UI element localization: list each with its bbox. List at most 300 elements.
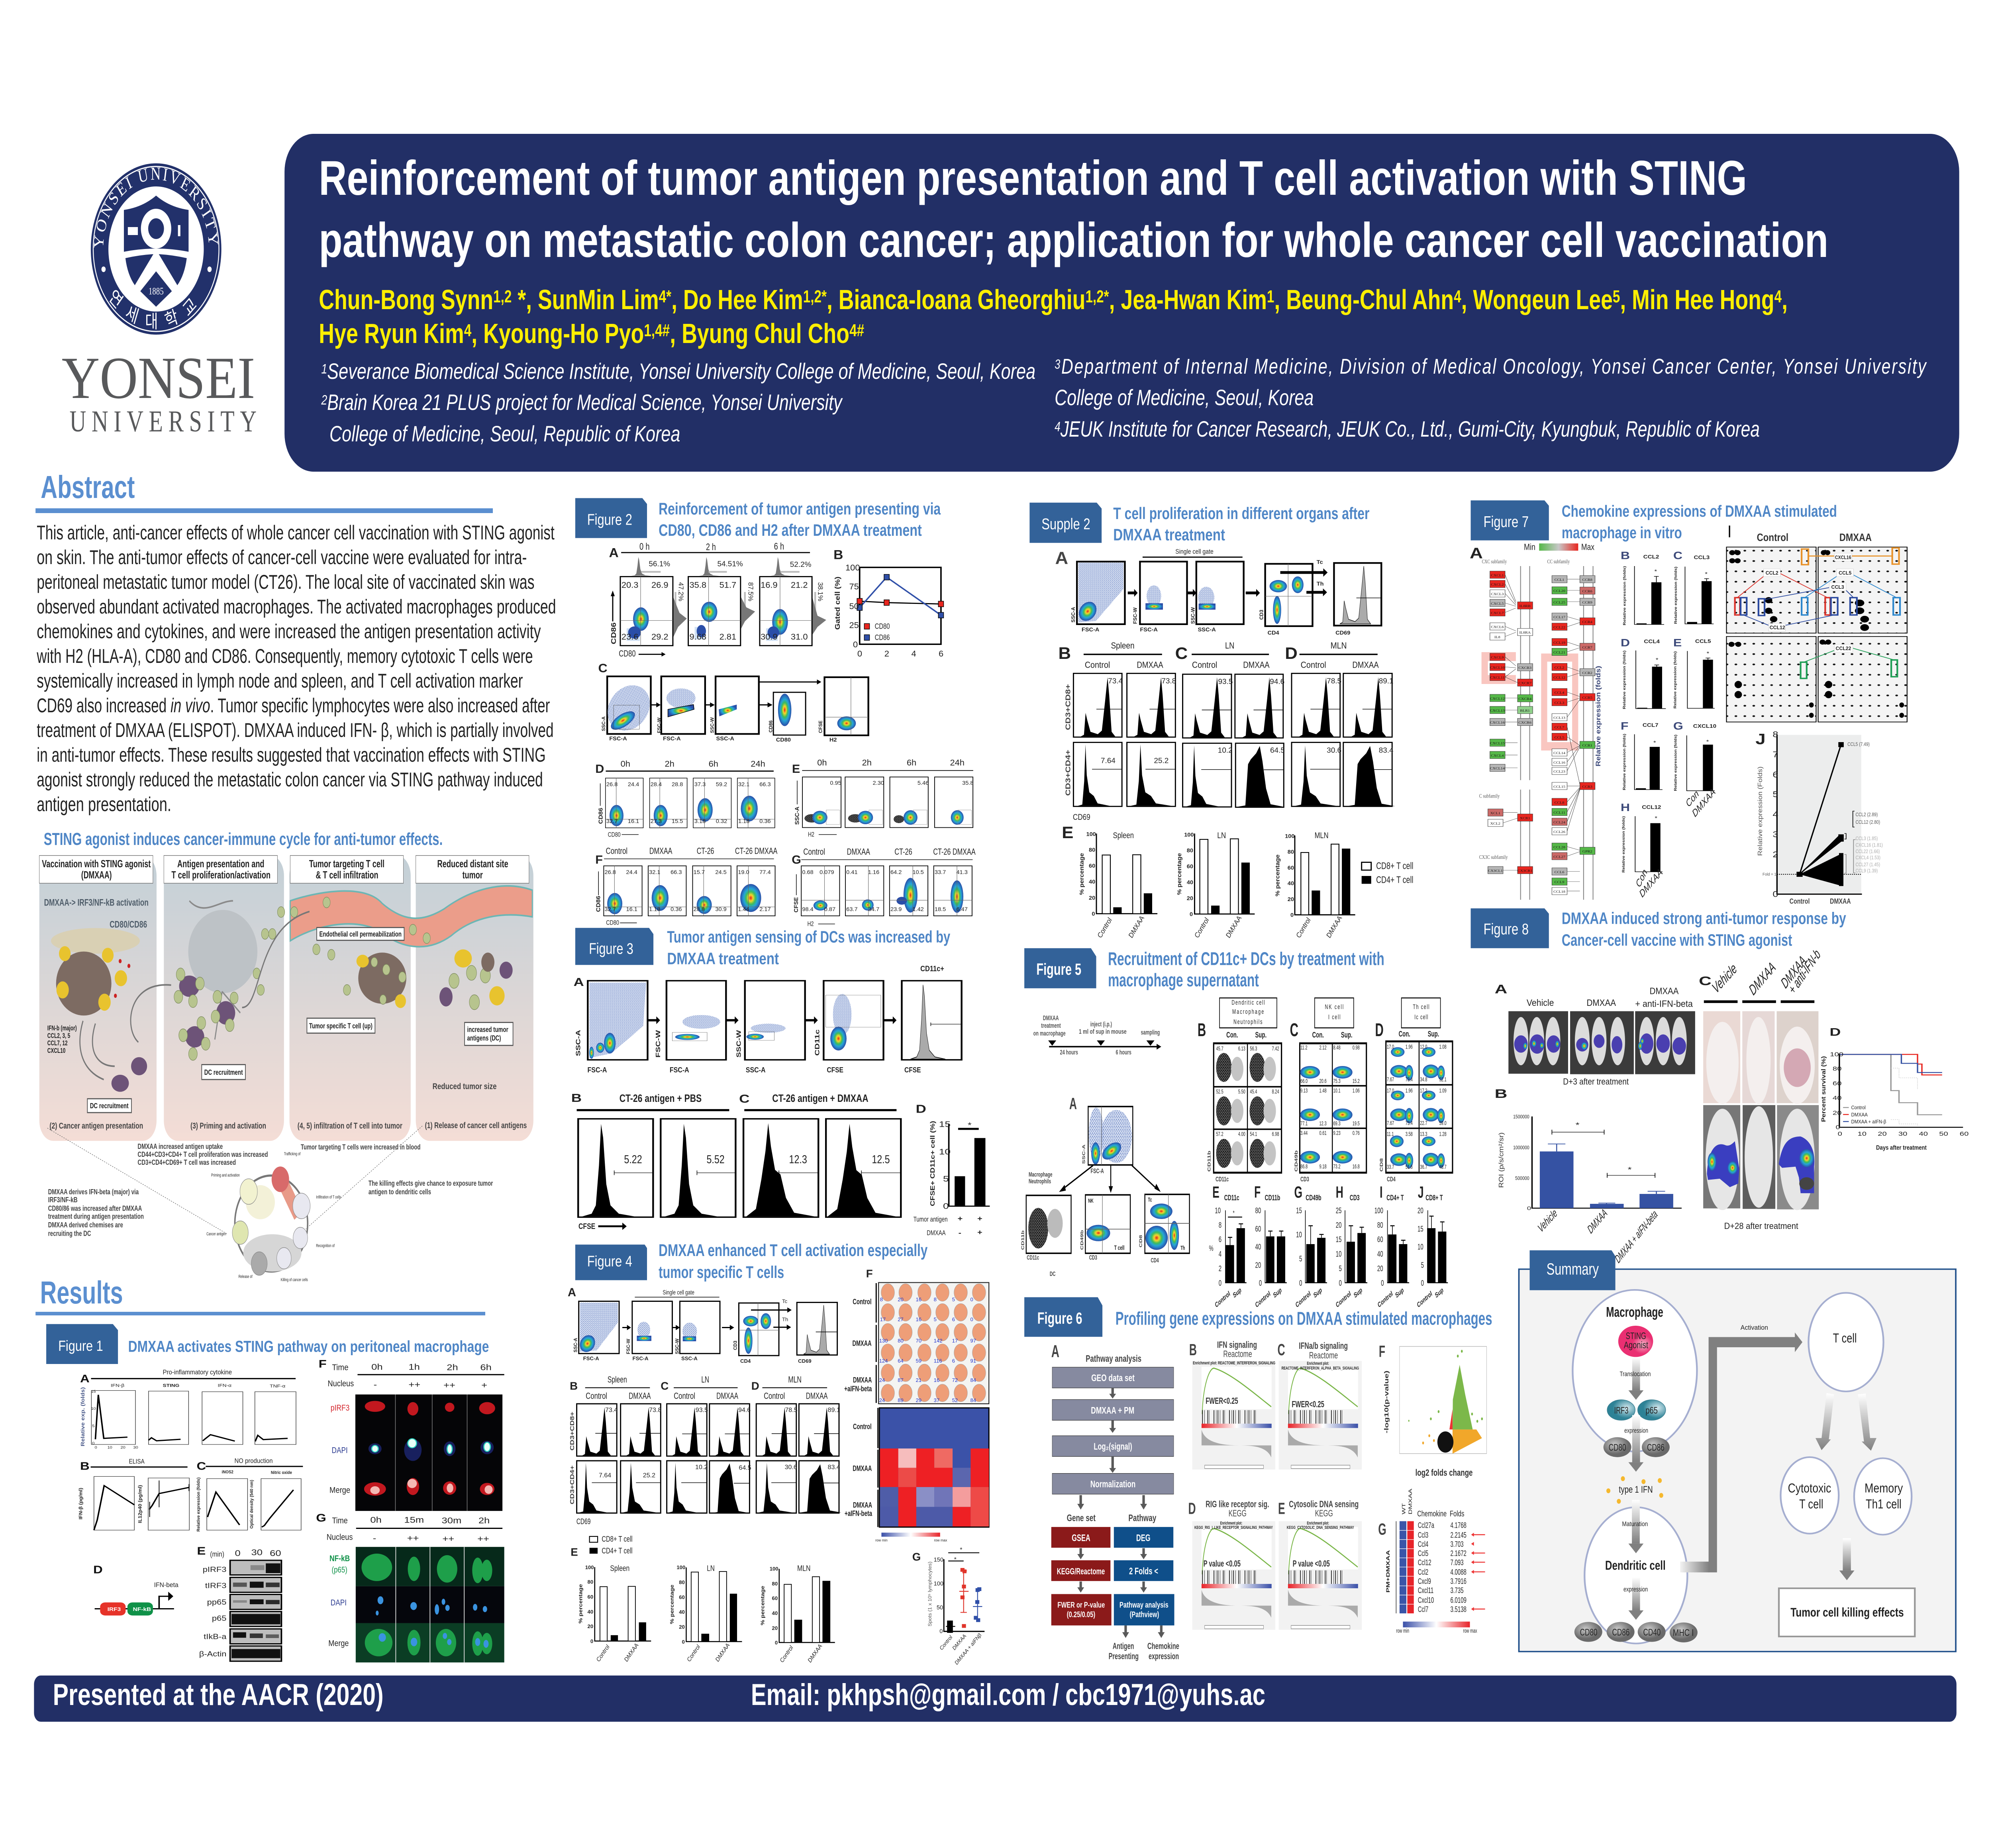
survival curve D: 20 bbox=[1878, 1131, 1887, 1137]
micrographs: NF-kB: G bbox=[316, 1512, 326, 1524]
authors: Chun-Bong Synn1,2 *, SunMin Lim4*, Do Hee Kim1,2*, Bianca-Ioana Gheorghiu1,2*, Jea-Hwan Kim1, Beung-Chul Ahn4, Wongeun Lee5, Min Hee Hong4, bbox=[319, 284, 1788, 316]
ELISPOT plate F: 84 bbox=[971, 1377, 976, 1383]
GSEA plots B-E: E bbox=[1278, 1500, 1285, 1518]
flow plots D: CD80 bbox=[608, 831, 621, 838]
flow plots A: 2 h bbox=[706, 542, 716, 553]
flowchart A: Antigen bbox=[1113, 1641, 1134, 1651]
flow plots G: G bbox=[792, 853, 801, 866]
flow plots A: 47.2% bbox=[677, 582, 685, 601]
arrow: activation: Activation bbox=[1741, 1324, 1768, 1331]
flow plots A: 21.2 bbox=[791, 580, 808, 590]
KEGG chemokine pathway A: CXCL5 bbox=[1491, 602, 1504, 606]
rotated labels for Figure 8: DMXAA + aIFN-beta bbox=[1613, 1207, 1659, 1266]
western blot: 0 bbox=[235, 1549, 241, 1558]
affiliations left: College of Medicine, Seoul, Republic of Korea bbox=[329, 421, 680, 446]
header banner bbox=[284, 134, 1959, 472]
micrographs: NF-kB: ++ bbox=[407, 1534, 419, 1543]
flow plots G: 98.4 bbox=[802, 906, 814, 913]
bar charts E: 40 bbox=[1187, 880, 1193, 886]
flow plot grids B C D: 0.98 bbox=[1353, 1045, 1360, 1051]
flow plots D: 3.18 bbox=[694, 818, 706, 825]
figure title bbox=[659, 1241, 928, 1282]
flow plot grids B C D: 48.7 bbox=[1439, 1164, 1447, 1170]
bar charts E to J: Control bbox=[1295, 1289, 1312, 1309]
heatmap F: row min bbox=[875, 1538, 888, 1542]
histograms B C D: 25.2 bbox=[643, 1472, 655, 1479]
bar chart B: 0 bbox=[1527, 1205, 1531, 1211]
flow plot grids B C D: 1.28 bbox=[1439, 1131, 1447, 1137]
GSEA plots B-E: D bbox=[1188, 1500, 1196, 1518]
flow plots G bbox=[792, 847, 976, 927]
gating plots A: SSC-A bbox=[1198, 627, 1216, 633]
histograms B C D: 89.1 bbox=[828, 1406, 840, 1413]
panel column: antigen presentation bbox=[164, 856, 284, 1141]
flow plot grids B C D: 17.0 bbox=[1387, 1087, 1394, 1094]
GSEA plots B-E: FWER<0.25 bbox=[1206, 1396, 1238, 1406]
bar charts E to J: Control bbox=[1255, 1289, 1271, 1309]
bar charts E to J: 4 bbox=[1219, 1249, 1221, 1258]
KEGG chemokine pathway A: CXCL7 bbox=[1491, 611, 1504, 615]
bar charts E: CD8+ T cell bbox=[1376, 861, 1413, 871]
flow plots A: 23.6 bbox=[622, 632, 638, 641]
flow plots G: 1.16 bbox=[868, 869, 879, 876]
flow plot grids B C D: 8.48 bbox=[1333, 1045, 1341, 1051]
flow gating A: Macrophage bbox=[1029, 1171, 1052, 1178]
chart: NO production: Optical density (540 nm) bbox=[249, 1480, 254, 1529]
chemokine heatmap G: 2.1672 bbox=[1450, 1548, 1467, 1558]
histograms B C D: 30.6 bbox=[785, 1464, 797, 1471]
notes around the cycle: CD44+CD3+CD4+ T cell proliferation was increased bbox=[137, 1150, 268, 1159]
flow plot grids B C D: 12.3 bbox=[1319, 1120, 1327, 1127]
summary label bbox=[1529, 1250, 1616, 1290]
bar charts E to J: Sup bbox=[1394, 1286, 1405, 1300]
figure label bbox=[575, 928, 653, 965]
flow plots G: CT-26 bbox=[894, 847, 912, 856]
histograms B C D: Control bbox=[1192, 660, 1217, 670]
flow plot grids B C D: 13.3 bbox=[1420, 1131, 1427, 1137]
KEGG chemokine pathway A: CCL11 bbox=[1553, 811, 1565, 815]
flow plot grids B C D: CD11b bbox=[1207, 1150, 1212, 1172]
bar charts E to J: 20 bbox=[1336, 1220, 1341, 1230]
notes around the cycle: Tumor targeting T cells were increased in blood bbox=[301, 1143, 421, 1151]
GSEA plots B-E: Enrichment plot: bbox=[1307, 1521, 1329, 1525]
flow plots G: 0.079 bbox=[820, 869, 834, 876]
fold change chart J: CCL2 (2.89) bbox=[1855, 811, 1878, 817]
KEGG chemokine pathway A: CXCR6 bbox=[1518, 721, 1531, 725]
KEGG chemokine pathway A: CCL2 bbox=[1555, 666, 1565, 670]
KEGG chemokine pathway A: CXCL15 bbox=[1490, 742, 1505, 745]
rotated labels for Figure 8: Vehicle bbox=[1710, 960, 1739, 997]
bar chart D: 5 bbox=[943, 1174, 949, 1184]
flowchart A: DEG bbox=[1136, 1533, 1151, 1543]
gating plots A: FSC-W bbox=[1132, 607, 1138, 624]
flow plot grids B C D: 5.50 bbox=[1238, 1088, 1245, 1095]
flow plots A: 16.9 bbox=[761, 580, 778, 590]
gating plots A: Tc bbox=[782, 1298, 788, 1304]
flow plots E: E bbox=[792, 762, 800, 776]
flow gating A: CD11c bbox=[1027, 1254, 1039, 1261]
western blot: 30 bbox=[251, 1548, 263, 1557]
chemokine heatmap G: Cxcl10 bbox=[1418, 1595, 1434, 1605]
ELISPOT plate F: 6 bbox=[952, 1358, 955, 1364]
ELISPOT plate F: 84 bbox=[971, 1397, 976, 1403]
histograms B C D: CD3+CD8+ bbox=[1064, 684, 1072, 730]
flow plots E: 24h bbox=[950, 758, 965, 768]
heatmap F: DMXAA bbox=[853, 1465, 872, 1473]
flow plot grids B C D: C bbox=[1290, 1020, 1298, 1041]
histograms B C D: 89.1 bbox=[1379, 677, 1394, 685]
chemokine heatmap G: Ccl5 bbox=[1418, 1548, 1428, 1558]
histograms B C D: Control bbox=[1301, 660, 1326, 670]
micrographs: pIRF3: F bbox=[319, 1358, 327, 1370]
heatmap F bbox=[845, 1408, 989, 1542]
line chart B: 2 bbox=[884, 649, 889, 658]
bar charts E: LN bbox=[707, 1564, 715, 1573]
flow plots F: 32.1 bbox=[649, 869, 661, 876]
heatmap F: row max bbox=[934, 1538, 947, 1542]
flow plot grids B C D: 7.67 bbox=[1387, 1076, 1394, 1083]
panel column: reduced distant tumor: Endothelial cell permeabilization bbox=[319, 930, 402, 939]
line chart B: B bbox=[833, 547, 843, 562]
figure label bbox=[575, 1244, 647, 1280]
logo: Yonsei University bbox=[62, 163, 257, 438]
bar chart D: + bbox=[977, 1215, 982, 1223]
chemokine heatmap G: Ccl4 bbox=[1418, 1539, 1429, 1549]
line chart B: 4 bbox=[912, 649, 916, 658]
flow plot grids B C D: 1.09 bbox=[1439, 1087, 1447, 1094]
gating C: CD86 bbox=[768, 720, 773, 733]
title: Reinforcement of tumor antigen presentation and T cell activation with STING bbox=[319, 151, 1747, 206]
gating plots A: FSC-A bbox=[1082, 627, 1099, 633]
bar chart B: B bbox=[1495, 1087, 1507, 1101]
micrographs: pIRF3: Time bbox=[332, 1363, 349, 1372]
macrophage cell: STING bbox=[1626, 1331, 1646, 1341]
bar charts E: DMXAA bbox=[1324, 915, 1344, 939]
macrophage cell: CD86 bbox=[1647, 1442, 1665, 1453]
macrophage cell: Agonist bbox=[1624, 1340, 1648, 1350]
heading: Results bbox=[35, 1275, 485, 1315]
cycle wheel bbox=[47, 1126, 422, 1282]
gating plots A bbox=[574, 964, 962, 1074]
chemokine heatmap G bbox=[1378, 1488, 1485, 1634]
GSEA plots B-E: Reactome bbox=[1309, 1350, 1338, 1361]
ELISPOT plate F: 72 bbox=[952, 1377, 958, 1383]
flowchart A: Presenting bbox=[1109, 1651, 1139, 1661]
notes around the cycle: IRF3/NF-kB bbox=[48, 1196, 78, 1204]
bar charts B to H: D bbox=[1621, 637, 1630, 649]
memory Th1 cell: Memory bbox=[1865, 1481, 1903, 1495]
authors: Hye Ryun Kim4, Kyoung-Ho Pyo1,4#, Byung Chul Cho4# bbox=[319, 318, 864, 349]
bar chart D: * bbox=[968, 1121, 972, 1129]
ELISPOT plate F: 64 bbox=[898, 1358, 904, 1364]
bar charts B to H: Relative expression (folds) bbox=[1673, 651, 1677, 709]
western blot: tIkB-a bbox=[204, 1633, 227, 1641]
bar charts B to H: Relative expression (folds) bbox=[1622, 651, 1626, 709]
flow plots D: 26.8 bbox=[606, 782, 618, 788]
figure label bbox=[1471, 500, 1549, 540]
flow plots D: 32.7 bbox=[606, 818, 618, 825]
flow gating A: CD3 bbox=[1089, 1254, 1097, 1261]
KEGG chemokine pathway A: CCL12 bbox=[1553, 676, 1565, 680]
rotated labels for Figure 8: DMXAA bbox=[1747, 959, 1778, 999]
flow plot grids B C D: 59.0 bbox=[1439, 1120, 1447, 1126]
bar charts B to H: CXCL10 bbox=[1693, 723, 1716, 729]
panel column: vaccination: (DMXAA) bbox=[81, 869, 112, 881]
flow gating A: Th bbox=[1180, 1245, 1185, 1251]
histograms B C D: MLN bbox=[1331, 640, 1347, 651]
bar charts E to J: 0 bbox=[1421, 1278, 1424, 1288]
KEGG chemokine pathway A: CXCL3 bbox=[1491, 593, 1504, 596]
survival curve D: 20 bbox=[1833, 1109, 1842, 1116]
chemokine heatmap G: DMXAA bbox=[1408, 1488, 1413, 1515]
gating plots A: FSC-A bbox=[670, 1066, 689, 1074]
timeline: on macrophage bbox=[1033, 1030, 1066, 1037]
western blot bbox=[197, 1545, 281, 1661]
gating C: H2 bbox=[829, 737, 837, 743]
bar charts E: 100 bbox=[1285, 833, 1295, 839]
dot plot G: 100 bbox=[934, 1581, 943, 1587]
bar charts E to J: Sup bbox=[1272, 1286, 1282, 1300]
bar charts B to H: * bbox=[1705, 571, 1708, 577]
rotated labels for Figure 7 bars: Con bbox=[1684, 788, 1700, 809]
western blot: 60 bbox=[270, 1549, 281, 1558]
flow plots D: 15.5 bbox=[672, 818, 683, 825]
KEGG chemokine pathway A: C subfamily bbox=[1479, 793, 1500, 799]
gating plots A: FSC-A bbox=[588, 1066, 607, 1074]
flow plot grids B C D: 73.2 bbox=[1333, 1163, 1341, 1170]
flow plots E: 0h bbox=[817, 758, 827, 768]
KEGG chemokine pathway A: CX3CR1 bbox=[1518, 869, 1533, 873]
mouse imaging A: DMXAA bbox=[1650, 986, 1679, 996]
bar charts E: LN bbox=[1217, 831, 1226, 840]
bar chart D: D bbox=[916, 1102, 926, 1115]
macrophage cell bbox=[1572, 1290, 1697, 1472]
histograms B and C bbox=[571, 1092, 901, 1231]
survival curve D: 60 bbox=[1960, 1131, 1969, 1137]
ELISPOT plate F: 17 bbox=[952, 1338, 958, 1344]
bar charts E: CD8+ T cell bbox=[602, 1534, 633, 1544]
bar charts E bbox=[1062, 823, 1413, 939]
mouse photos C bbox=[1699, 974, 1819, 1231]
chart: NO production bbox=[196, 1457, 303, 1532]
panel column: reduced distant tumor: Reduced distant site bbox=[437, 858, 508, 870]
flow plots A: 9.68 bbox=[689, 632, 706, 641]
flow plots F: 66.3 bbox=[671, 869, 682, 876]
cycle wheel: Trafficking of bbox=[284, 1152, 301, 1156]
bar charts E bbox=[571, 1534, 835, 1664]
ELISPOT plate F: DMXAA bbox=[853, 1340, 872, 1348]
cytotoxic T cell: Cytotoxic bbox=[1788, 1481, 1831, 1495]
flow plot grids B C D: 3.44 bbox=[1300, 1130, 1308, 1137]
flow gating A: CD8 bbox=[1138, 1235, 1143, 1248]
bar charts E: 80 bbox=[588, 1579, 593, 1585]
rotated labels for Figure 8: DMXAA bbox=[1778, 952, 1809, 992]
flow plot grids B C D: 73.4 bbox=[1406, 1120, 1413, 1126]
bar charts E to J: 20 bbox=[1255, 1260, 1261, 1270]
gating plots A: Th bbox=[1317, 581, 1323, 587]
KEGG chemokine pathway A: CCL19 bbox=[1553, 641, 1565, 645]
flow plot grids B C D: 54.1 bbox=[1250, 1131, 1257, 1137]
histograms B C D: 78.5 bbox=[1327, 677, 1341, 685]
flow plots G: Control bbox=[803, 847, 825, 856]
survival curve D: 0 bbox=[1836, 1124, 1840, 1131]
volcano plot F: F bbox=[1379, 1343, 1385, 1361]
ELISPOT plate F: 80 bbox=[898, 1338, 904, 1344]
flowchart A: (Pathview) bbox=[1130, 1610, 1159, 1619]
bar charts E: CD4+ T cell bbox=[602, 1546, 633, 1555]
histograms B C D: 7.64 bbox=[1101, 756, 1116, 764]
dendritic cell: Dendritic cell bbox=[1605, 1558, 1666, 1573]
western blot: p65 bbox=[212, 1615, 226, 1623]
fold change chart J: 0 bbox=[1772, 890, 1778, 899]
ELISPOT plate F: 20 bbox=[898, 1296, 904, 1302]
fold change chart J: DMXAA bbox=[1830, 898, 1851, 905]
KEGG chemokine pathway A: CCR7 bbox=[1582, 646, 1592, 650]
flow plots G: 18.5 bbox=[935, 906, 946, 913]
chemokine heatmap G: 3.7916 bbox=[1450, 1576, 1467, 1586]
KEGG chemokine pathway A: IL8RA bbox=[1519, 631, 1531, 635]
dot plot G: DMXAA + aIFNβ bbox=[953, 1632, 983, 1666]
flow plots D: 32.1 bbox=[738, 782, 749, 788]
flow plot grids B C D: 17.0 bbox=[1387, 1043, 1394, 1050]
histograms B C D: CD3+CD4+ bbox=[1064, 750, 1072, 796]
chemokine heatmap G: 4.1768 bbox=[1450, 1521, 1467, 1530]
figure title: T cell proliferation in different organs after bbox=[1113, 504, 1370, 523]
bar charts E: 80 bbox=[1288, 849, 1294, 855]
heatmap F: DMXAA bbox=[853, 1501, 872, 1509]
KEGG chemokine pathway A: CCR2 bbox=[1582, 671, 1592, 675]
bar charts E: % percentage bbox=[760, 1586, 766, 1625]
flow plot grids B C D: Con. bbox=[1226, 1030, 1238, 1039]
abstract text block: systemically increased in lymph node and spleen, and T cell activation marker bbox=[37, 670, 523, 692]
flow plots D: 28.4 bbox=[651, 782, 662, 788]
panel column: vaccination: DMXAA-> IRF3/NF-kB activation bbox=[44, 897, 149, 908]
volcano plot F bbox=[1379, 1343, 1486, 1478]
rotated labels for Figure 7 bars: Con bbox=[1634, 867, 1649, 889]
flow plots A: 20.3 bbox=[622, 580, 638, 590]
micrographs: NF-kB: Time bbox=[332, 1516, 348, 1526]
bar charts E to J: CD8+ T bbox=[1425, 1193, 1443, 1202]
ELISPOT plate F: 8 bbox=[934, 1296, 937, 1302]
bar charts E: 100 bbox=[770, 1566, 778, 1572]
chemokine heatmap G: Ccl3 bbox=[1418, 1530, 1428, 1540]
rotated labels for Figure 7 bars: DMXAA bbox=[1637, 866, 1664, 900]
histograms B C D: DMXAA bbox=[1352, 660, 1379, 670]
bar charts E: DMXAA bbox=[1127, 915, 1146, 939]
notes around the cycle: DMXAA increased antigen uptake bbox=[137, 1143, 223, 1151]
bar charts E to J: G bbox=[1294, 1184, 1302, 1201]
flow plots D: 28.8 bbox=[672, 782, 683, 788]
diagram: promoter bbox=[93, 1564, 178, 1615]
flow plot grids B C D: 20.6 bbox=[1319, 1078, 1327, 1084]
panel: Summary bbox=[1519, 1250, 1956, 1652]
KEGG chemokine pathway A: Min bbox=[1524, 542, 1535, 552]
flow plot grids B C D: 10.1 bbox=[1333, 1087, 1341, 1094]
affiliations left bbox=[321, 359, 1035, 446]
chart: pro-inflammatory cytokine: TNF-α bbox=[270, 1384, 285, 1389]
flow plot grids B C D: CD49b bbox=[1294, 1150, 1299, 1172]
panel column: vaccination: IFN-b (major) bbox=[47, 1025, 77, 1032]
flow plot grids B C D: 1.96 bbox=[1406, 1087, 1413, 1094]
KEGG chemokine pathway A: CXCL9 bbox=[1491, 656, 1504, 660]
histograms B C D: DMXAA bbox=[629, 1391, 651, 1401]
macrophage cell: Macrophage bbox=[1606, 1304, 1663, 1320]
histograms B C D: C bbox=[661, 1380, 669, 1392]
flow gating A: CD49b bbox=[1080, 1230, 1084, 1250]
line chart B bbox=[833, 547, 943, 658]
arrows to T cell subsets bbox=[1816, 1393, 1876, 1451]
flow plots F bbox=[595, 846, 778, 926]
fold change chart J: 8 bbox=[1772, 729, 1778, 739]
KEGG chemokine pathway A: CCL7 bbox=[1555, 726, 1565, 729]
flow plots G: 63.7 bbox=[846, 906, 858, 913]
bar charts E to J: 0 bbox=[1339, 1278, 1342, 1288]
flow plots A: 35.8 bbox=[689, 580, 706, 590]
T cell bbox=[1808, 1293, 1884, 1391]
chemokine heatmap G: Cxcl11 bbox=[1418, 1585, 1433, 1595]
ELISPOT plate F: 17 bbox=[880, 1316, 886, 1322]
heatmap F: Control bbox=[853, 1423, 872, 1431]
flow plots D: 0h bbox=[621, 759, 630, 768]
flow plots F: CD86 bbox=[595, 896, 602, 912]
gating plots A: A bbox=[568, 1286, 576, 1299]
bar chart B: * bbox=[1576, 1121, 1580, 1129]
histograms B C D: 78.5 bbox=[785, 1406, 798, 1413]
bar charts E: 60 bbox=[588, 1594, 593, 1600]
flow plots A: 52.2% bbox=[790, 560, 811, 568]
bar charts E to J: CD3 bbox=[1350, 1193, 1360, 1202]
flow plots F: F bbox=[595, 853, 603, 866]
affiliations left: 2Brain Korea 21 PLUS project for Medical Science, Yonsei University bbox=[321, 390, 843, 415]
flow plot grids B C D: Sup. bbox=[1341, 1030, 1353, 1039]
panel column: vaccination: CCL7, 12 bbox=[47, 1040, 68, 1047]
dot blot arrays I bbox=[1727, 525, 1907, 722]
flow plot grids B C D: 75.3 bbox=[1333, 1078, 1341, 1084]
chart: pro-inflammatory cytokine: Relative exp. (folds) bbox=[80, 1387, 86, 1446]
fold change chart J: Control bbox=[1790, 898, 1810, 905]
blood vessel bbox=[290, 886, 532, 947]
panel column: reduced distant tumor: (4, 5) infiltration of T cell into tumor bbox=[298, 1121, 402, 1131]
fold change chart J: Fold = 1 bbox=[1763, 872, 1776, 877]
bar charts E to J: E bbox=[1212, 1184, 1220, 1201]
ELISPOT plate F: 37 bbox=[934, 1397, 939, 1403]
figure title bbox=[1562, 909, 1846, 949]
micrographs: NF-kB: ++ bbox=[477, 1534, 489, 1544]
flow plots G: 10.5 bbox=[912, 869, 924, 876]
figure label bbox=[46, 1324, 118, 1364]
icon: university seal: 연세대학교 bbox=[106, 286, 206, 332]
timeline: 1 ml of sup in mouse bbox=[1079, 1028, 1127, 1036]
chart: NO production: Nitric oxide bbox=[271, 1470, 292, 1475]
GSEA plots B-E: KEGG_RIG_I_LIKE_RECEPTOR_SIGNALING_PATHWAY bbox=[1194, 1525, 1273, 1530]
icon: university seal bbox=[91, 163, 222, 335]
flow plots F: 28.8 bbox=[694, 906, 705, 913]
flow plot grids B C D: Neutrophils bbox=[1233, 1018, 1262, 1026]
fold change chart J bbox=[1755, 729, 1883, 905]
abstract text block: peritoneal metastatic tumor model (CT26). The local site of vaccinated skin was bbox=[37, 571, 534, 593]
KEGG chemokine pathway A: CXCL11 bbox=[1490, 676, 1505, 680]
chemokine heatmap G: Ccl12 bbox=[1418, 1558, 1431, 1567]
flow plot grids B C D: 45.4 bbox=[1250, 1088, 1257, 1095]
bar charts E: DMXAA bbox=[1224, 915, 1243, 939]
bar charts E: 100 bbox=[585, 1564, 594, 1570]
histograms B C D: 10.2 bbox=[1218, 746, 1233, 754]
flow plot grids B C D: 73.4 bbox=[1406, 1076, 1413, 1083]
ELISPOT plate F: 52 bbox=[952, 1397, 958, 1403]
chart: pro-inflammatory cytokine: STING bbox=[163, 1383, 180, 1388]
cycle wheel: Infiltration of T cells bbox=[316, 1195, 341, 1199]
figure title: Profiling gene expressions on DMXAA stimulated macrophages bbox=[1116, 1309, 1492, 1329]
